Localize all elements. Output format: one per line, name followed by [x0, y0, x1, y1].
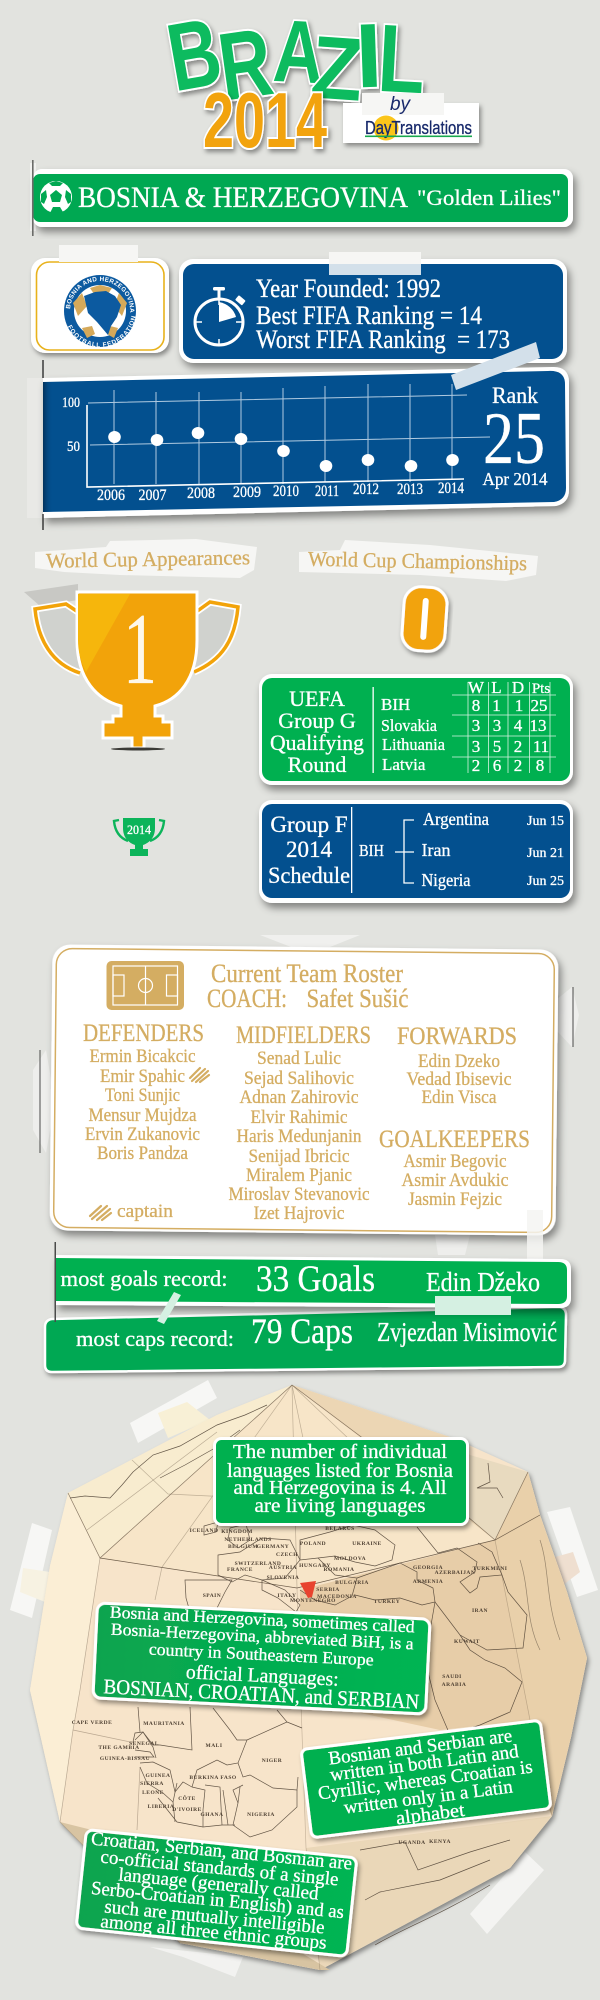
callout: country description: Bosnia and Herzegovina, sometimes called: [109, 1603, 416, 1636]
globe country labels: KENYA: [429, 1839, 451, 1845]
icon: gold trophy with appearances count: [24, 584, 238, 750]
trophy base shadow: [111, 748, 165, 750]
stat: current rank: Rank: [492, 383, 538, 408]
column: midfielders: Sejad Salihovic: [244, 1068, 354, 1089]
title word: BRAZIL: I: [354, 4, 384, 107]
callout: scripts: written in both Latin and: [329, 1741, 520, 1786]
panel: team roster: [50, 944, 558, 1236]
icon: federation crest: [64, 275, 136, 347]
column: defenders: Boris Pandza: [97, 1143, 189, 1164]
tape: chart corner: [451, 342, 540, 390]
chart x labels: 2006: [97, 487, 125, 504]
callout: number of languages: The number of individual: [233, 1441, 447, 1463]
table: results: 1: [492, 696, 501, 715]
heading: Group F 2014 Schedule: Schedule: [268, 863, 350, 888]
title word: BRAZIL: B: [160, 0, 229, 112]
globe facet: upper right grey: [468, 1455, 528, 1540]
heading: country name: BOSNIA & HERZEGOVINA: [78, 181, 408, 214]
heading: UEFA Group G Qualifying Round: [270, 686, 364, 777]
column: midfielders: Senijad Ibricic: [248, 1146, 350, 1167]
panel: federation crest card: [30, 245, 174, 359]
globe country labels: SENEGAL: [129, 1741, 159, 1747]
heading: Group F 2014 Schedule: [268, 812, 350, 888]
tape: roster left: [33, 1050, 52, 1153]
globe country labels: MOLDOVA: [334, 1556, 366, 1562]
tape: globe lower right: [470, 1852, 544, 1934]
globe facet: lower right: [306, 1816, 552, 1970]
column: defenders: Toni Sunjic: [105, 1085, 180, 1106]
table: results: 8: [472, 696, 480, 715]
panel: founding and FIFA ranking: [179, 252, 567, 363]
illustration: paper globe map: [30, 1385, 587, 1970]
column: defenders: [83, 1020, 204, 1164]
chart data points: [108, 427, 459, 472]
icon: federation crest: BOSNIA AND HERZEGOVINA: [66, 276, 134, 312]
column: midfielders: Adnan Zahirovic: [240, 1087, 358, 1108]
schedule dates: Jun 25: [527, 874, 564, 889]
table: team names: [381, 695, 445, 774]
column: defenders: Ermin Bicakcic: [90, 1046, 196, 1067]
table: results: 6: [493, 756, 501, 775]
label: World Cup Appearances: World Cup Appearances: [46, 545, 250, 573]
heading: UEFA Group G Qualifying Round: UEFA: [289, 686, 345, 711]
table: team names: BIH: [381, 695, 410, 714]
column: goalkeepers: Jasmin Fejzic: [408, 1189, 502, 1210]
callout: country description: BOSNIAN, CROATIAN, and SERBIAN: [103, 1674, 420, 1714]
chart x labels: 2013: [397, 481, 423, 498]
globe country labels: MAURITANIA: [143, 1721, 185, 1727]
column: forwards: Edin Visca: [422, 1087, 497, 1108]
table: results: Pts: [532, 681, 550, 697]
globe facet lines: [60, 1385, 552, 1970]
globe country labels: HUNGARY: [299, 1563, 331, 1569]
callout: scripts: Cyrillic, whereas Croatian is: [317, 1757, 534, 1804]
callout: number of languages: languages listed for Bosnia: [227, 1460, 453, 1482]
callout: scripts: [301, 1720, 551, 1838]
table: results: [468, 678, 550, 775]
column: defenders: Mensur Mujdza: [88, 1105, 197, 1126]
column: midfielders: Senad Lulic: [257, 1048, 341, 1069]
schedule dates: [527, 814, 564, 889]
schedule dates: Jun 21: [527, 846, 564, 861]
globe country labels: BULGARIA: [335, 1580, 369, 1586]
text: BIH: BIH: [359, 841, 384, 860]
table: results: 8: [536, 756, 544, 775]
label: World Cup Championships: World Cup Championships: [308, 547, 527, 575]
bracket: [395, 820, 414, 883]
schedule opponents: [422, 809, 489, 890]
globe country labels: IRAN: [472, 1608, 488, 1614]
text: year founded: Year Founded: 1992: [256, 274, 441, 303]
table: results: 5: [493, 737, 501, 756]
panel: country banner: [30, 160, 573, 236]
column: midfielders: Elvir Rahimic: [250, 1107, 348, 1128]
globe country labels: BELARUS: [325, 1526, 355, 1532]
text: most goals label: most goals record:: [60, 1266, 228, 1291]
globe country labels: BELGIUM: [228, 1544, 258, 1550]
globe country labels: MONTENEGRO: [290, 1598, 336, 1604]
schedule dates: Jun 15: [527, 814, 564, 829]
heading: UEFA Group G Qualifying Round: Round: [288, 752, 346, 777]
legend: captain: [90, 1201, 174, 1222]
tape: banner left: [32, 160, 34, 236]
globe country labels: GUINEA-BISSAU: [100, 1756, 150, 1762]
globe country labels: D'IVOIRE: [172, 1807, 202, 1813]
heading: current team roster: Current Team Roster: [211, 959, 403, 988]
globe country labels: SLOVENIA: [267, 1575, 299, 1581]
logo: by DayTranslations: by: [390, 94, 412, 115]
table: team names: Lithuania: [382, 735, 445, 754]
schedule opponents: Nigeria: [422, 870, 470, 890]
column: forwards: FORWARDS: [397, 1023, 517, 1050]
text: goals record holder: Edin Džeko: [426, 1267, 540, 1297]
chart x labels: 2011: [315, 483, 339, 500]
logo: by DayTranslations: DayTranslations: [365, 118, 472, 138]
globe country labels: CÔTE: [178, 1794, 196, 1802]
globe country labels: CZECH: [276, 1552, 298, 1558]
globe facet: upper left light: [68, 1385, 292, 1558]
chart: ranking per year: [62, 384, 490, 504]
stat: 79 caps: 79 Caps: [251, 1311, 353, 1351]
tape: roster top: [260, 935, 360, 947]
heading: UEFA Group G Qualifying Round: Group G: [278, 708, 356, 733]
label: World Cup Appearances: [35, 539, 257, 578]
tape: caps diagonal: [157, 1292, 181, 1324]
callout: number of languages: [214, 1438, 468, 1524]
panel: rank history chart: [27, 342, 569, 530]
panel: UEFA qualifying table: [259, 674, 573, 785]
heading: nickname: "Golden Lilies": [417, 185, 561, 210]
tape: ranking panel top: [329, 252, 421, 275]
table: results: 11: [533, 737, 549, 756]
tape: globe bottom: [150, 1947, 243, 1977]
stat: current rank: Apr 2014: [482, 469, 548, 489]
globe country labels: GEORGIA: [413, 1565, 443, 1571]
tape: chart left edge top: [42, 360, 44, 378]
table: results: W: [468, 678, 485, 697]
table: results: 2: [472, 756, 480, 775]
globe country labels: ROMANIA: [324, 1567, 354, 1573]
column: goalkeepers: [379, 1126, 530, 1210]
column: defenders: DEFENDERS: [83, 1020, 204, 1047]
globe country labels: UGANDA: [398, 1840, 426, 1846]
legend: captain: captain: [117, 1201, 174, 1222]
globe country labels: AZERBAIJAN: [435, 1570, 475, 1576]
globe country labels: TURKMENI: [473, 1566, 507, 1572]
icon: small green 2014 trophy: [114, 818, 164, 856]
callout: Serbo-Croatian: Croatian, Serbian, and Bosnian are: [90, 1829, 353, 1875]
column: midfielders: Miroslav Stevanovic: [228, 1184, 370, 1205]
globe country labels: GHANA: [201, 1812, 223, 1818]
globe facet: right tan: [495, 1472, 587, 1816]
globe facet: mid east tan: [300, 1540, 530, 1730]
trophy cup: [77, 592, 197, 748]
globe country labels: KUWAIT: [454, 1639, 480, 1645]
icon: football pitch: [106, 961, 184, 1010]
icon: small green 2014 trophy: 2014: [127, 822, 151, 837]
callout: scripts: written only in a Latin: [343, 1776, 514, 1819]
trophy handles: [35, 602, 238, 673]
globe country labels: KINGDOM: [221, 1529, 253, 1535]
globe country labels: GUINEA: [145, 1773, 171, 1779]
table: team names: Latvia: [382, 755, 426, 774]
globe country labels: MACEDONIA: [317, 1594, 357, 1600]
title word: BRAZIL: L: [375, 5, 428, 114]
icon: stopwatch: [195, 287, 246, 345]
table: results: 4: [514, 716, 523, 735]
tape: chart left edge bottom: [42, 514, 44, 530]
trophy highlight: [78, 594, 130, 672]
heading: Group F 2014 Schedule: 2014: [286, 837, 332, 862]
heading: Group F 2014 Schedule: Group F: [270, 812, 348, 837]
table: results: 2: [514, 737, 522, 756]
table: results: L: [491, 678, 502, 697]
callout: scripts: Bosnian and Serbian are: [327, 1726, 513, 1770]
stat: current rank: 25: [483, 398, 545, 480]
trophy handle interiors: [35, 602, 238, 673]
globe country labels: THE GAMBIA: [98, 1745, 140, 1751]
table: results: 3: [493, 716, 501, 735]
callout: Serbo-Croatian: Serbo-Croatian in English) and as: [90, 1878, 345, 1923]
chart x labels: 2008: [187, 485, 215, 502]
globe country labels: ICELAND: [190, 1528, 218, 1534]
table: results: 2: [514, 756, 522, 775]
table: team names: Slovakia: [381, 716, 437, 735]
logo sun: [374, 116, 398, 140]
globe country labels: CAPE VERDE: [72, 1720, 112, 1726]
chart y labels: 50: [67, 439, 80, 455]
column: forwards: [397, 1023, 517, 1108]
map marker: Bosnia: [300, 1581, 316, 1598]
globe country labels: NETHERLANDS: [224, 1537, 272, 1543]
tape: goals vertical: [527, 1210, 543, 1273]
table: results: 3: [472, 716, 480, 735]
table: results: 3: [472, 737, 480, 756]
callout: country description: official Languages:: [185, 1661, 339, 1691]
globe facet: left light: [30, 1493, 100, 1822]
title word: BRAZIL: R: [212, 7, 279, 121]
column: forwards: Edin Dzeko: [418, 1051, 500, 1072]
globe country labels: GERMANY: [257, 1544, 289, 1550]
table: results: 25: [530, 696, 548, 715]
schedule divider: [351, 807, 352, 893]
callout: Serbo-Croatian: among all three ethnic groups: [100, 1911, 328, 1954]
callout: country description: country in Southeastern Europe: [148, 1640, 374, 1669]
tape: chart left: [27, 378, 44, 518]
globe facet: central upper: [100, 1385, 495, 1588]
stat: current rank: [482, 383, 548, 489]
callout: Serbo-Croatian: language (generally called: [117, 1864, 320, 1905]
globe country labels: SAUDI: [442, 1674, 462, 1680]
chart left shading: [43, 382, 53, 512]
globe country labels: SIERRA: [140, 1781, 164, 1787]
column: defenders: Ervin Zukanovic: [85, 1124, 200, 1145]
column: goalkeepers: Asmir Avdukic: [402, 1170, 508, 1191]
tape: globe right: [547, 1507, 598, 1597]
label: World Cup Championships: [299, 540, 538, 581]
icon: captain mark: [190, 1068, 209, 1082]
tape: roster bottom: [435, 1235, 470, 1255]
globe country labels: ITALY: [277, 1593, 297, 1599]
globe country labels: NIGER: [262, 1758, 283, 1764]
tape: by: [362, 93, 444, 115]
globe coasts and borders: [70, 1405, 560, 1945]
tape: globe left: [10, 1523, 52, 1618]
table: results: 1: [515, 696, 523, 715]
text: best ranking: Best FIFA Ranking = 14: [256, 301, 482, 330]
column: midfielders: Haris Medunjanin: [236, 1126, 362, 1147]
globe country labels: FRANCE: [227, 1567, 253, 1573]
chart x labels: 2010: [273, 483, 299, 500]
globe country labels: SERBIA: [316, 1587, 340, 1593]
title: Brazil 2014: [160, 0, 428, 164]
chart axes: [87, 405, 464, 487]
chart x labels: [97, 480, 464, 504]
column: goalkeepers: GOALKEEPERS: [379, 1126, 530, 1153]
logo underline: [365, 136, 472, 137]
globe country labels: ARABIA: [442, 1682, 466, 1688]
globe country labels: UKRAINE: [352, 1541, 382, 1547]
panel: most caps record: [45, 1307, 566, 1372]
chart x labels: 2014: [438, 480, 464, 497]
globe country labels: SPAIN: [203, 1593, 221, 1599]
tape: goals mint: [435, 1296, 511, 1315]
tape: goals left edge: [54, 1242, 56, 1322]
text: caps record holder: Zvjezdan Misimović: [377, 1317, 557, 1347]
column: goalkeepers: Asmir Begovic: [404, 1151, 506, 1172]
table: results: D: [512, 678, 524, 697]
column: defenders: Emir Spahic: [100, 1066, 185, 1087]
table: results: 13: [530, 716, 546, 735]
globe country labels: BURKINA FASO: [189, 1775, 237, 1781]
title year: 2014: 2014: [203, 76, 327, 164]
column: midfielders: Izet Hajrovic: [254, 1203, 344, 1224]
chart y labels: [62, 395, 80, 455]
trophy number: 1: [123, 593, 157, 706]
chart y labels: 100: [62, 395, 80, 411]
schedule opponents: Argentina: [423, 809, 489, 829]
callout: number of languages: are living languages: [254, 1495, 426, 1517]
tape: roster right: [556, 987, 579, 1047]
text: coach name: Safet Sušić: [306, 984, 408, 1013]
callout: country description: [93, 1603, 430, 1714]
chart x labels: 2007: [138, 487, 166, 504]
text: coach label: COACH:: [207, 984, 287, 1013]
stat: 33 goals: 33 Goals: [256, 1259, 375, 1300]
globe country labels: AUSTRIA: [269, 1565, 297, 1571]
column: midfielders: [228, 1022, 371, 1224]
globe facet: upper right top: [292, 1385, 495, 1540]
globe country labels: NIGERIA: [247, 1812, 275, 1818]
globe country labels: ARMENIA: [413, 1579, 443, 1585]
globe country labels: LEONE: [142, 1790, 164, 1796]
icon: federation crest: FOOTBALL FEDERATION: [68, 316, 136, 347]
callout: country description: Bosnia-Herzegovina, abbreviated BiH, is a: [110, 1620, 415, 1653]
globe facet: lower left underside: [60, 1822, 330, 1970]
panel: Group F schedule: [259, 800, 573, 903]
tape: globe top left: [130, 1380, 217, 1443]
title word: BRAZIL: A: [271, 1, 326, 102]
chart x labels: 2009: [233, 484, 261, 501]
table divider: [372, 687, 374, 773]
callout: number of languages: and Herzegovina is 4. All: [234, 1477, 447, 1499]
callout: Serbo-Croatian: such are mutually intelligible: [104, 1896, 326, 1939]
globe country labels: MALI: [206, 1743, 222, 1749]
panel: most goals record: [55, 1255, 571, 1308]
column: midfielders: MIDFIELDERS: [236, 1022, 371, 1049]
trophy shadow: [24, 584, 78, 606]
heading: UEFA Group G Qualifying Round: Qualifying: [270, 730, 364, 755]
title word: BRAZIL: [160, 0, 428, 121]
logo: by DayTranslations: [343, 93, 479, 143]
column: forwards: Vedad Ibisevic: [406, 1069, 512, 1090]
text: most caps label: most caps record:: [76, 1326, 234, 1351]
chart x labels: 2012: [353, 481, 379, 498]
table grid: [452, 682, 556, 773]
text: worst ranking: Worst FIFA Ranking = 173: [256, 325, 510, 354]
callout: scripts: alphabet: [395, 1800, 467, 1829]
globe country labels: POLAND: [300, 1541, 326, 1547]
globe country labels: [72, 1526, 507, 1846]
globe country labels: LIBERIA: [148, 1804, 174, 1810]
callout: Serbo-Croatian: [76, 1829, 357, 1956]
column: midfielders: Miralem Pjanic: [246, 1165, 352, 1186]
title word: BRAZIL: Z: [308, 17, 366, 120]
stat: championships zero: [401, 586, 448, 652]
callout: Serbo-Croatian: co-official standards of a single: [100, 1847, 339, 1890]
globe country labels: SWITZERLAND: [235, 1561, 281, 1567]
icon: soccer ball: [40, 181, 72, 214]
tape: crest card: [59, 245, 138, 262]
schedule opponents: Iran: [422, 840, 450, 860]
globe country labels: TURKEY: [374, 1599, 400, 1605]
